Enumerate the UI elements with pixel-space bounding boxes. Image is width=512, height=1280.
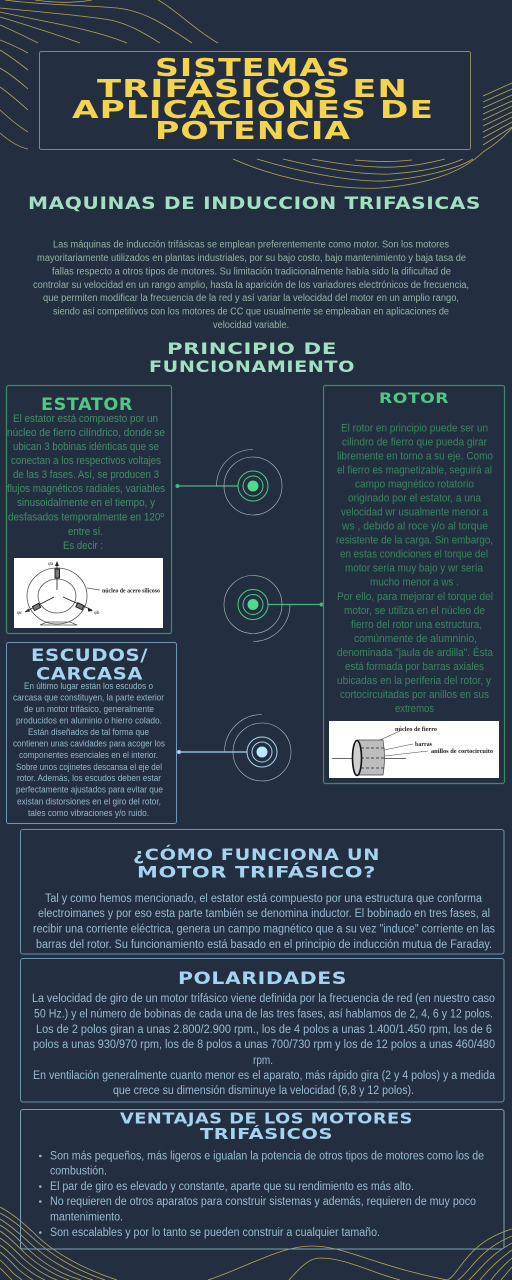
escudos text: componentes esenciales en el interior.	[19, 750, 158, 760]
polaridades text: rpm.	[253, 1055, 273, 1067]
polaridades text: Los de 2 polos giran a unas 2.800/2.900 rpm., los de 4 polos a unas 1.400/1.450 rpm, los de 6	[36, 1024, 492, 1036]
estator text: conectan a los respectivos voltajes	[11, 455, 161, 467]
panel: ventajas	[20, 1110, 504, 1249]
title: APLICACIONES DE	[72, 95, 434, 124]
ventajas heading: TRIFÁSICOS	[200, 1124, 333, 1143]
rotor text: comúnmente de alumninio,	[354, 633, 477, 645]
ventajas heading: VENTAJAS DE LOS MOTORES	[120, 1110, 413, 1128]
decorative gold waves: top right	[233, 83, 512, 188]
connector: rotor target icon	[224, 576, 324, 642]
polaridades text: polos a unas 930/970 rpm, los de 8 polos a unas 700/730 rpm y los de 12 polos a unas 460/480	[33, 1039, 495, 1051]
intro paragraph: fallas respecto a otros tipos de motores. Su limitación tradicionalmente había sido la dificultad de	[52, 266, 451, 278]
como funciona text: electroimanes y por eso esta parte también se denomina inductor. El bobinado en tres fases, al	[38, 908, 490, 920]
connector: estator target icon	[176, 450, 282, 515]
ventajas heading	[120, 1110, 413, 1143]
escudos heading: ESCUDOS/	[31, 646, 148, 666]
rotor text: mucho menor a ws .	[370, 576, 459, 588]
rotor text: El rotor en principio puede ser un	[341, 422, 488, 434]
escudos text: perfectamente ajustados para evitar que	[16, 784, 163, 794]
polaridades heading: POLARIDADES	[178, 969, 347, 989]
como funciona text: barras del rotor. Su funcionamiento está basado en el principio de inducción mutua de Faraday.	[36, 939, 492, 951]
escudos text: contienen unas cavidades para acoger los	[13, 738, 165, 748]
estator text: entre sí.	[68, 526, 103, 538]
estator text: sinusoidalmente en el tiempo, y	[17, 497, 155, 509]
como funciona text	[33, 893, 495, 951]
panel: estator	[6, 386, 172, 634]
rotor text: fierro del rotor una estructura,	[351, 619, 482, 631]
rotor text: resistente de la carga. Sin embargo,	[336, 534, 493, 546]
heading: maquinas de induccion: MAQUINAS DE INDUCCION TRIFASICAS	[28, 194, 481, 214]
rotor text: cilindro de fierro que pueda girar	[342, 436, 487, 448]
title panel	[40, 52, 470, 150]
rotor text	[336, 422, 494, 715]
escudos text: En último lugar están los escudos o	[24, 681, 153, 691]
panel: polaridades	[20, 958, 504, 1102]
intro paragraph: Las máquinas de inducción trifásicas se emplean preferentemente como motor. Son los motores	[53, 240, 449, 250]
title	[72, 53, 434, 145]
intro paragraph: mayoritariamente utilizados en plantas industriales, por su bajo costo, bajo mantenimiento y baja tasa de	[37, 253, 466, 264]
rotor diagram: barras	[415, 742, 433, 748]
stator diagram: φc	[17, 611, 23, 616]
polaridades text	[32, 993, 496, 1097]
intro paragraph: controlar su velocidad en un rango amplio, hasta la aparición de los variadores electrónicos de frecuencia,	[33, 280, 469, 291]
rotor text: originado por el estator, a una	[348, 492, 482, 504]
escudos text: Están diseñados de tal forma que	[28, 727, 149, 737]
escudos text: producidos en aluminio o hierro colado.	[16, 716, 162, 726]
como funciona text: Tal y como hemos mencionado, el estator está compuesto por una estructura que conforma	[45, 893, 483, 905]
escudos text: tales como vibraciones y/o ruido.	[28, 808, 149, 818]
estator text	[7, 413, 165, 552]
rotor text: libremente en torno a su eje. Como	[337, 450, 493, 462]
ventajas bullet list: Son más pequeños, más ligeros e igualan la potencia de otros tipos de motores como los de	[50, 1150, 484, 1162]
panel: como funciona	[20, 830, 504, 954]
rotor diagram: núcleo de fierro	[395, 727, 437, 733]
panel: rotor	[324, 386, 504, 784]
rotor text: motor, se utiliza en el núcleo de	[344, 605, 485, 617]
estator text: Es decir :	[63, 540, 103, 552]
intro paragraph: siendo así competitivos con los motores de CC que usualmente se empleaban en aplicaciones de	[53, 306, 449, 318]
connector: escudos target icon	[177, 714, 291, 781]
rotor diagram	[329, 721, 499, 778]
intro paragraph	[33, 240, 469, 331]
rotor text: extremos	[395, 703, 434, 715]
ventajas bullet list: Son escalables y por lo tanto se pueden construir a cualquier tamaño.	[50, 1227, 380, 1239]
ventajas bullet list	[39, 1150, 484, 1239]
estator text: desfasados temporalmente en 120º	[8, 512, 164, 524]
escudos text: rotor. Además, los escudos deben estar	[17, 773, 161, 783]
heading: principio de funcionamiento: FUNCIONAMIENTO	[149, 357, 355, 376]
ventajas bullet list: El par de giro es elevado y constante, aparte que su rendimiento es más alto.	[50, 1181, 414, 1193]
rotor text: velocidad wr usualmente menor a	[341, 506, 489, 518]
decorative gold waves: bottom	[0, 1207, 512, 1280]
intro paragraph: velocidad variable.	[213, 320, 289, 331]
escudos text: Sobre unos cojinetes descansa el eje del	[16, 762, 162, 772]
escudos text	[13, 681, 165, 818]
escudos text: carcasa que constituyen, la parte exterior	[13, 692, 164, 702]
heading: principio de funcionamiento	[149, 339, 355, 376]
title: POTENCIA	[155, 116, 351, 145]
rotor text: ubicadas en la periferia del rotor, y	[337, 675, 491, 687]
rotor text: está formada por barras axiales	[345, 661, 484, 673]
rotor text: el fierro es magnetizable, seguirá al	[337, 464, 492, 476]
estator text: flujos magnéticos radiales, variables	[7, 483, 165, 495]
rotor text: en estas condiciones el torque del	[340, 548, 488, 560]
title: SISTEMAS	[155, 53, 351, 82]
rotor text: campo magnético rotatorio	[355, 478, 474, 490]
rotor text: motor sería muy bajo y wr sería	[345, 562, 484, 574]
estator heading: ESTATOR	[41, 395, 133, 415]
estator text: ubican 3 bobinas idénticas que se	[13, 441, 159, 453]
rotor text: cortocircuitadas por anillos en sus	[340, 689, 489, 701]
intro paragraph: que permiten modificar la frecuencia de la red y así variar la velocidad del motor en un amplio rango,	[43, 293, 459, 304]
stator diagram: núcleo de acero silicoso	[102, 588, 160, 594]
escudos heading: CARCASA	[36, 664, 143, 684]
rotor heading: ROTOR	[379, 391, 449, 407]
heading: principio de funcionamiento: PRINCIPIO DE	[167, 339, 337, 358]
como funciona heading: MOTOR TRIFÁSICO?	[137, 862, 376, 882]
stator diagram: φa	[48, 562, 54, 567]
ventajas bullet list: combustión.	[50, 1166, 107, 1178]
escudos heading	[31, 646, 148, 684]
stator diagram	[14, 558, 163, 628]
como funciona heading	[133, 845, 380, 882]
escudos text: de un motor trifásico, generalmente	[24, 704, 154, 714]
rotor text: Por ello, para mejorar el torque del	[337, 591, 493, 603]
como funciona heading: ¿CÓMO FUNCIONA UN	[133, 845, 380, 864]
rotor text: ws , debido al roce y/o al torque	[341, 520, 488, 532]
title: TRIFÁSICOS EN	[97, 74, 408, 103]
polaridades text: que crece su dimensión disminuye la velocidad (6,8 y 12 polos).	[113, 1085, 414, 1097]
rotor text: denominada "jaula de ardilla". Ésta	[337, 646, 494, 659]
rotor diagram: anillos de cortocircuito	[431, 749, 493, 755]
decorative gold waves: top left	[0, 0, 218, 149]
ventajas bullet list: mantenimiento.	[50, 1212, 123, 1224]
panel: escudos / carcasa	[6, 642, 176, 824]
estator text: El estator está compuesto por un	[13, 413, 158, 425]
estator text: de las 3 fases. Así, se producen 3	[13, 469, 159, 481]
ventajas bullet list: No requieren de otros aparatos para construir sistemas y además, requieren de muy poco	[50, 1196, 476, 1208]
estator text: núcleo de fierro cilíndrico, donde se	[7, 427, 165, 439]
escudos text: existan distorsiones en el giro del rotor,	[17, 796, 161, 806]
stator diagram: φb	[94, 611, 100, 616]
